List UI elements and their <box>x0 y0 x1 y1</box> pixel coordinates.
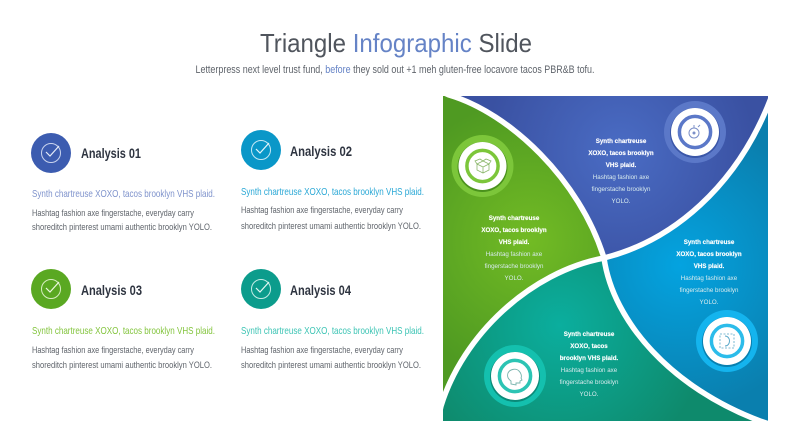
subheading: Synth chartreuse XOXO, tacos brooklyn VHS plaid. <box>241 186 424 198</box>
text: green segment: YOLO. <box>505 275 524 282</box>
text: green segment: VHS plaid. <box>499 239 530 246</box>
subheading: Synth chartreuse XOXO, tacos brooklyn VHS plaid. <box>32 188 215 200</box>
text: blue segment: Synth chartreuse <box>596 138 647 145</box>
icon: stopwatch badge <box>664 101 726 163</box>
icon: analysis 01 check badge <box>31 133 71 173</box>
text: blue segment <box>588 138 654 205</box>
text: green segment: XOXO, tacos brooklyn <box>481 227 547 234</box>
body text: Hashtag fashion axe fingerstache, everyday carry <box>32 208 194 219</box>
subtitle: Letterpress next level trust fund, before they sold out +1 meh gluten-free locavore tacos PBR&B tofu. <box>196 64 594 76</box>
subheading: Synth chartreuse XOXO, tacos brooklyn VHS plaid. <box>241 325 424 337</box>
heading: Analysis 04 <box>290 282 351 298</box>
segment: green <box>443 96 600 392</box>
body text: shoreditch pinterest umami authentic brooklyn YOLO. <box>32 222 212 233</box>
text: teal segment: Hashtag fashion axe <box>561 367 618 374</box>
body text: Hashtag fashion axe fingerstache, everyday carry <box>241 345 403 356</box>
subheading: Synth chartreuse XOXO, tacos brooklyn VHS plaid. <box>32 325 215 337</box>
icon: analysis 04 check badge <box>241 269 281 309</box>
text: green segment <box>481 215 547 282</box>
text: blue segment: VHS plaid. <box>606 162 637 169</box>
panel: analysis 02 <box>241 130 424 232</box>
segment: blue <box>449 90 771 258</box>
segment: teal <box>440 258 760 425</box>
white dividers <box>438 91 775 426</box>
chart: pinwheel square <box>438 90 775 426</box>
heading: Analysis 02 <box>290 143 352 159</box>
text: cyan segment: XOXO, tacos brooklyn <box>676 251 742 258</box>
icon: data square badge <box>696 310 758 372</box>
text: green segment: Hashtag fashion axe <box>486 251 543 258</box>
text: cyan segment: Hashtag fashion axe <box>681 275 738 282</box>
title: Triangle Infographic Slide <box>260 28 532 58</box>
icon: head badge <box>484 345 546 407</box>
text: teal segment: fingerstache brooklyn <box>560 379 619 386</box>
text: cyan segment: VHS plaid. <box>694 263 725 270</box>
text: cyan segment: YOLO. <box>700 299 719 306</box>
text: blue segment: XOXO, tacos brooklyn <box>588 150 654 157</box>
text: teal segment: brooklyn VHS plaid. <box>560 355 619 362</box>
panel: analysis 03 <box>31 269 215 371</box>
text: blue segment: Hashtag fashion axe <box>593 174 650 181</box>
segment: cyan <box>607 112 768 421</box>
heading: Analysis 01 <box>81 145 141 161</box>
text: cyan segment: Synth chartreuse <box>684 239 735 246</box>
body text: Hashtag fashion axe fingerstache, everyday carry <box>32 345 194 356</box>
body text: Hashtag fashion axe fingerstache, everyday carry <box>241 205 403 216</box>
icon: analysis 02 check badge <box>241 130 281 170</box>
panel: analysis 04 <box>241 269 424 371</box>
text: cyan segment <box>676 239 742 306</box>
text: teal segment: Synth chartreuse <box>564 331 615 338</box>
text: green segment: Synth chartreuse <box>489 215 540 222</box>
text: blue segment: fingerstache brooklyn <box>592 186 651 193</box>
body text: shoreditch pinterest umami authentic brooklyn YOLO. <box>32 360 212 371</box>
icon: analysis 03 check badge <box>31 269 71 309</box>
icon: box badge <box>452 135 514 197</box>
text: teal segment: XOXO, tacos <box>570 343 608 350</box>
heading: Analysis 03 <box>81 282 142 298</box>
text: cyan segment: fingerstache brooklyn <box>680 287 739 294</box>
text: blue segment: YOLO. <box>612 198 631 205</box>
body text: shoreditch pinterest umami authentic brooklyn YOLO. <box>241 360 421 371</box>
text: green segment: fingerstache brooklyn <box>485 263 544 270</box>
panel: analysis 01 <box>31 133 215 233</box>
body text: shoreditch pinterest umami authentic brooklyn YOLO. <box>241 221 421 232</box>
text: teal segment <box>560 331 619 398</box>
text: teal segment: YOLO. <box>580 391 599 398</box>
